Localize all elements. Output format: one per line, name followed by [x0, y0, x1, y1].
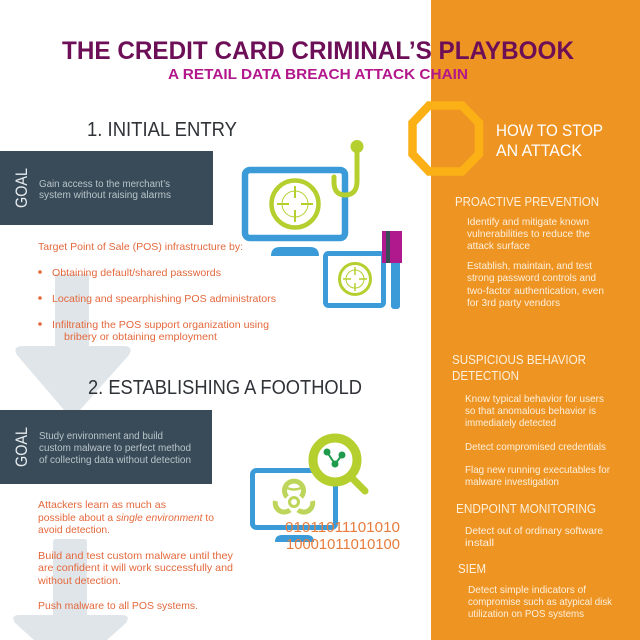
text block: initial entry tactics: bribery or obtaining employment — [64, 331, 217, 343]
section: suspicious behavior detection: SUSPICIOUS BEHAVIOR — [452, 352, 586, 367]
heading: establishing a foothold: 2. ESTABLISHING A FOOTHOLD — [88, 377, 362, 399]
text block: foothold details: Push malware to all POS systems. — [38, 600, 198, 612]
icon: small monitor with card reader — [326, 231, 402, 309]
panel: goal 2: Study environment and build — [39, 431, 163, 442]
panel: goal 1: system without raising alarms — [39, 190, 171, 201]
section: proactive prevention: PROACTIVE PREVENTION — [455, 194, 599, 209]
heading: how to stop an attack — [496, 121, 603, 160]
title: THE CREDIT CARD CRIMINAL’S PLAYBOOK — [62, 37, 574, 65]
text block: initial entry tactics: Obtaining default/shared passwords — [52, 267, 221, 279]
binary digits: 01011011101010 — [285, 519, 400, 536]
section: suspicious behavior detection: malware investigation — [465, 476, 559, 488]
section: endpoint monitoring: Detect out of ordinary software — [465, 525, 603, 537]
section: suspicious behavior detection: Know typical behavior for users — [465, 393, 604, 405]
arrow: second step down arrow — [13, 539, 128, 640]
section: proactive prevention — [455, 194, 604, 309]
section: suspicious behavior detection: so that anomalous behavior is — [465, 405, 596, 417]
section: suspicious behavior detection: Flag new running executables for — [465, 464, 610, 476]
text block: foothold details: without detection. — [37, 575, 121, 587]
heading: how to stop an attack: HOW TO STOP — [496, 121, 603, 140]
section: proactive prevention: strong password controls and — [467, 272, 596, 284]
panel: goal 1: GOAL — [12, 168, 31, 208]
section: suspicious behavior detection: Detect compromised credentials — [465, 441, 606, 453]
section: proactive prevention: for 3rd party vendors — [467, 297, 560, 309]
text block: foothold details: Build and test custom malware until they — [38, 550, 234, 562]
section: proactive prevention: attack surface — [467, 240, 530, 252]
icon: stop octagon — [412, 106, 479, 172]
section: SIEM: compromise such as atypical disk — [468, 596, 613, 608]
text block: foothold details: avoid detection. — [38, 524, 110, 536]
section: SIEM — [458, 561, 613, 620]
heading: how to stop an attack: AN ATTACK — [496, 141, 583, 160]
section: proactive prevention: vulnerabilities to reduce the — [467, 228, 590, 240]
section: endpoint monitoring — [456, 501, 603, 549]
section: suspicious behavior detection: DETECTION — [452, 368, 519, 383]
icon: phishing hook on monitor — [245, 140, 364, 256]
text block: foothold details: are confident it will work successfully and — [38, 562, 233, 574]
section: suspicious behavior detection: immediately detected — [465, 417, 556, 429]
binary digits — [285, 519, 400, 553]
panel: goal 2: custom malware to perfect method — [39, 443, 191, 454]
panel: goal 1: Gain access to the merchant’s — [39, 179, 170, 190]
icon: magnifying glass with network nodes — [313, 438, 365, 491]
panel: goal 1 — [0, 151, 213, 225]
section: SIEM: utilization on POS systems — [468, 608, 584, 620]
section: proactive prevention: two-factor authentication, even — [467, 285, 604, 297]
text block: initial entry tactics: Target Point of Sale (POS) infrastructure by: — [38, 241, 243, 253]
section: SIEM: Detect simple indicators of — [468, 584, 586, 596]
icon: biohazard monitor — [252, 470, 336, 542]
text block: foothold details: Attackers learn as much as — [38, 499, 166, 511]
text block: initial entry tactics: Locating and spearphishing POS administrators — [52, 293, 276, 305]
section: endpoint monitoring: ENDPOINT MONITORING — [456, 501, 596, 516]
heading: initial entry: 1. INITIAL ENTRY — [87, 119, 237, 141]
text block: initial entry tactics: Infiltrating the POS support organization using — [52, 319, 269, 331]
section: endpoint monitoring: install — [465, 537, 494, 549]
text block: initial entry tactics — [38, 241, 276, 343]
panel: goal 2: GOAL — [12, 427, 31, 467]
text block: foothold details: possible about a single environment to — [38, 512, 214, 524]
panel: goal 2: of collecting data without detection — [39, 455, 191, 466]
arrow: first step down arrow — [15, 274, 131, 410]
section: SIEM: SIEM — [458, 561, 486, 576]
section: suspicious behavior detection — [452, 352, 610, 488]
section: proactive prevention: Identify and mitigate known — [467, 216, 589, 228]
text block: foothold details — [37, 499, 234, 612]
subtitle: A RETAIL DATA BREACH ATTACK CHAIN — [168, 66, 468, 83]
binary digits: 10001011010100 — [286, 536, 400, 553]
panel: orange sidebar background — [431, 0, 640, 640]
panel: goal 2 — [0, 410, 212, 484]
section: proactive prevention: Establish, maintain, and test — [467, 260, 592, 272]
